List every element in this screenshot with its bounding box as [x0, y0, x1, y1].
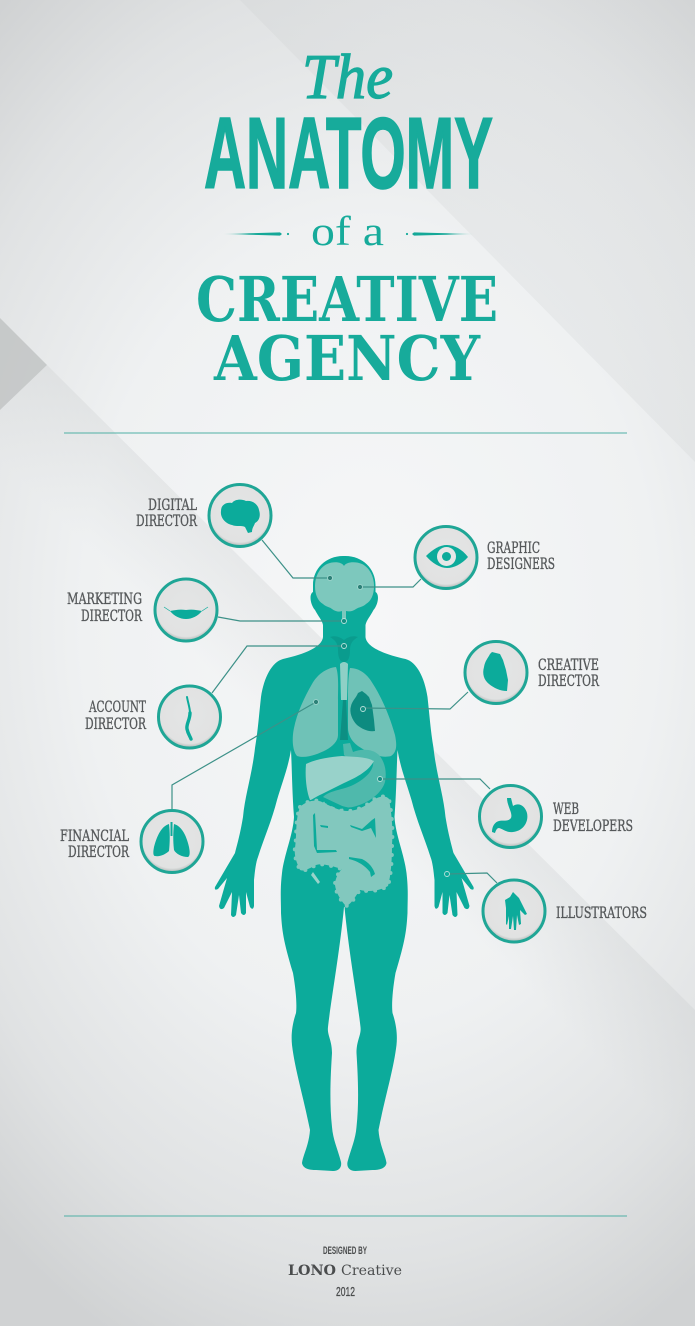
badge: brain	[209, 484, 271, 546]
organ: throat	[330, 636, 358, 662]
title word: Creative: CREATIVE	[196, 263, 498, 336]
label	[487, 539, 555, 573]
callout: account director	[85, 686, 220, 748]
label: DEVELOPERS	[553, 817, 633, 835]
year: 2012	[336, 1284, 355, 1299]
organ: stomach	[323, 743, 386, 807]
badge: heart	[465, 642, 527, 704]
label	[136, 496, 198, 530]
label	[67, 590, 143, 625]
title	[196, 41, 498, 395]
label: CREATIVE	[538, 656, 599, 674]
lono creative: Creative	[341, 1263, 402, 1279]
connector lines	[172, 540, 497, 883]
lono creative: LONO	[288, 1263, 336, 1279]
organ: left lung	[293, 667, 338, 757]
callout: creative director	[465, 642, 600, 704]
callout: illustrators	[483, 880, 647, 942]
organ: heart	[350, 691, 375, 731]
label	[538, 656, 600, 690]
label: FINANCIAL	[60, 827, 129, 845]
organ: liver	[306, 756, 374, 800]
label: ACCOUNT	[88, 698, 146, 716]
label: GRAPHIC	[487, 539, 540, 557]
label: DIRECTOR	[68, 843, 130, 861]
organ: intestines	[295, 797, 392, 906]
callout: web developers	[480, 786, 633, 848]
label	[60, 827, 130, 861]
organ: right lung	[348, 668, 396, 757]
badge: hand	[483, 880, 545, 942]
title word: Agency: AGENCY	[213, 322, 481, 395]
organ: spine	[340, 700, 348, 740]
connector dots	[314, 576, 450, 876]
divider with of a	[222, 208, 475, 254]
label: DIRECTOR	[538, 672, 600, 690]
callout: graphic designers	[415, 526, 555, 588]
organ: brain	[315, 562, 374, 620]
label: DIRECTOR	[81, 607, 143, 625]
label: DIGITAL	[148, 496, 197, 514]
label	[553, 800, 633, 835]
title word: The: The	[302, 41, 393, 112]
badge: stomach	[480, 786, 542, 848]
organ: trachea	[340, 662, 348, 700]
label: DIRECTOR	[85, 715, 147, 733]
label: DESIGNERS	[487, 555, 555, 573]
badge: eye	[415, 526, 477, 588]
badge: mouth	[155, 579, 217, 641]
title word: Anatomy: ANATOMY	[204, 98, 493, 210]
designed by: DESIGNED BY	[323, 1245, 367, 1257]
human body figure	[215, 556, 474, 1171]
badge: lungs	[141, 810, 203, 872]
callout: financial director	[60, 810, 203, 872]
label: ILLUSTRATORS	[556, 904, 647, 922]
badge: spine	[158, 686, 220, 748]
divider with of a: of a	[311, 208, 384, 254]
label	[85, 698, 147, 733]
label: WEB	[553, 800, 579, 818]
callout: digital director	[136, 484, 271, 546]
footer credits	[288, 1245, 402, 1299]
label: DIRECTOR	[136, 512, 198, 530]
label: MARKETING	[67, 590, 142, 608]
callout: marketing director	[67, 579, 217, 641]
body silhouette	[215, 556, 474, 1171]
lono creative	[288, 1263, 402, 1279]
